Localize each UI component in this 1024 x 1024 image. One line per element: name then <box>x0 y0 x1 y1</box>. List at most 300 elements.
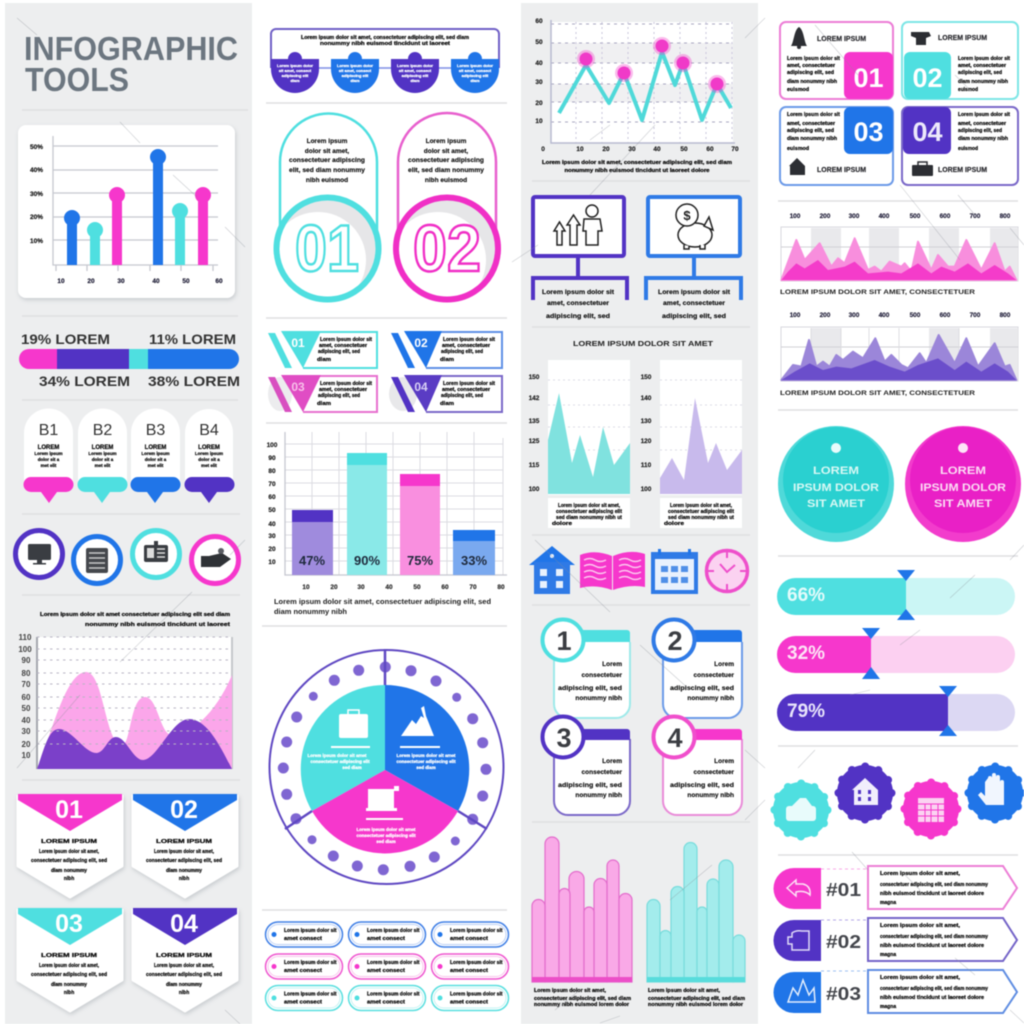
panel: arch 01: 01 <box>295 211 359 285</box>
text block: pink chart caption: LOREM IPSUM DOLOR SIT AMET, CONSECTETUER <box>780 289 975 296</box>
badge: pink circle: SIT AMET <box>934 498 992 510</box>
tab B1: met elit <box>41 463 57 468</box>
x axis labels: 20 <box>330 584 338 591</box>
area chart: cyan: Lorem ipsum dolor sit amet, <box>558 503 621 509</box>
panel: ribbon 04: Lorem ipsum dolor sit <box>443 381 495 387</box>
row: pink pills: Lorem ipsum dolor sit <box>367 960 420 966</box>
tab B2 <box>78 408 128 503</box>
panel: monitor frame with people icon: Lorem ipsum dolor sit <box>542 289 615 296</box>
panel: arrow row #03: nibh euismod tincidunt ut laoreet dolore <box>880 995 984 1001</box>
semicircle 4: sit amet, consect <box>459 68 492 73</box>
panel: arrow row #02: #02 <box>826 932 861 952</box>
y axis labels: 30 <box>268 533 276 540</box>
panel: top header box with four semicircles <box>271 29 499 93</box>
area chart: lavender: 150 <box>641 374 652 381</box>
y axis labels: 40 <box>268 521 276 528</box>
panel: arrow row #02: Lorem ipsum dolor sit amet, <box>880 923 961 929</box>
text block: purple chart caption: LOREM IPSUM DOLOR SIT AMET, CONSECTETUER <box>780 390 975 397</box>
sector: cyan: Lorem ipsum dolor sit amet <box>307 753 367 758</box>
panel: shield card 04: consectetuer adipiscing elit, sed <box>146 972 222 978</box>
panel: card 01 with bell: Lorem ipsum dolor sit <box>787 56 840 62</box>
panel: ribbon 03: amet, consectetuer <box>319 387 367 393</box>
row: blue pills: amet consect <box>284 936 322 942</box>
panel: numbered card 4: Lorem <box>714 758 734 765</box>
area chart: lavender: sed diam nonummy nibh ut <box>668 515 734 521</box>
axis labels: 30 <box>628 146 636 153</box>
area chart: purple mountains <box>781 312 1018 381</box>
y axis labels: 90 <box>22 656 31 665</box>
panel: arrow row #03: magna <box>880 1004 896 1010</box>
panel: numbered card 4 <box>654 716 742 815</box>
tab B2: met elit <box>95 463 111 468</box>
row: cyan pills: Lorem ipsum dolor sit <box>367 992 420 998</box>
row: blue pills: Lorem ipsum dolor sit <box>450 928 503 934</box>
row: pink pills: Lorem ipsum dolor sit <box>284 960 337 966</box>
y axis labels: 70 <box>268 481 276 488</box>
row: pink pills: amet consect <box>284 968 322 974</box>
semicircle 2: sit amet, consect <box>339 68 372 73</box>
panel: card 02 with hat: LOREM IPSUM <box>938 33 987 42</box>
panel: numbered card 2: 2 <box>667 626 683 656</box>
semicircle 3: Lorem ipsum dolor <box>397 63 434 68</box>
panel: numbered card 1: nonummy nibh <box>575 695 622 702</box>
area chart: purple mountains: 100 <box>790 312 801 319</box>
panel: arrow row #03 <box>773 970 1017 1013</box>
panel: numbered card 3: consectetuer <box>582 769 622 776</box>
row: cyan pills: Lorem ipsum dolor sit <box>450 992 503 998</box>
tab B3: LOREM <box>145 445 166 451</box>
icon: hand with coin <box>192 536 238 584</box>
semicircle 4: adipiscing elit <box>462 73 489 78</box>
panel: card 01 with bell: amet, consectetuer <box>787 63 835 69</box>
axis labels: 70 <box>731 146 739 153</box>
panel: ribbon 03: adipiscing elit, sed <box>318 393 360 399</box>
panel: shield card 03: Lorem ipsum dolor sit amet, <box>39 963 100 969</box>
progress bar: 32% <box>777 628 1015 679</box>
text block: area chart caption: nonummy nibh euismod tincidunt ut laoreet <box>85 622 230 628</box>
panel: arch 02: consectetuer adipiscing <box>408 157 484 164</box>
area chart: lavender: Lorem ipsum dolor sit amet, <box>670 503 733 509</box>
line chart with pink markers <box>535 18 739 153</box>
x axis labels <box>302 584 505 591</box>
panel: shield card 04: LOREM IPSUM <box>156 953 212 959</box>
bar chart: cyan rounded bars <box>647 842 745 982</box>
panel: numbered card 3: 3 <box>556 723 572 753</box>
tab B3 <box>131 408 180 503</box>
panel: ribbon 03 <box>268 375 377 412</box>
panel: numbered card 3: nonummy nibh <box>575 792 622 799</box>
panel: card 01 with bell: 01 <box>853 63 884 93</box>
y axis labels: 90 <box>268 455 276 462</box>
semicircle 2: Lorem ipsum dolor <box>337 63 374 68</box>
panel: card 02 with hat: 02 <box>912 63 943 93</box>
area chart: purple mountains: 600 <box>940 312 951 319</box>
row: blue pills: Lorem ipsum dolor sit <box>284 928 337 934</box>
badge: cyan circle: SIT AMET <box>807 498 865 510</box>
panel: shield card 01: 01 <box>55 796 83 824</box>
panel: ribbon 03: Lorem ipsum dolor sit <box>320 381 372 387</box>
y axis labels: 40% <box>30 167 43 174</box>
area chart: pink mountains: 200 <box>820 213 831 220</box>
panel: shield card 01 <box>18 794 122 897</box>
area chart: lavender: dolore <box>664 521 684 527</box>
panel: shield card 04: Lorem ipsum dolor sit amet, <box>154 963 215 969</box>
axis labels: 40 <box>535 60 543 67</box>
axis labels: 60 <box>535 18 543 25</box>
area chart: lavender <box>641 360 742 528</box>
badge: pink circle <box>905 426 1021 542</box>
x axis labels <box>57 278 223 285</box>
tab B2: B2 <box>93 422 112 439</box>
text block: line chart caption: nonummy nibh euismod tincidunt ut laoreet dolore <box>564 168 710 174</box>
tab B3: B3 <box>146 422 165 439</box>
bar value labels: 90% <box>354 553 380 568</box>
panel: card 04 with briefcase: adipiscing elit, sed <box>958 128 1002 134</box>
badge: pink circle: LOREM <box>940 465 986 477</box>
text block: bar chart captions: consectetuer adipiscing elit, sed diam <box>534 996 632 1002</box>
x axis labels: 40 <box>152 278 160 285</box>
area chart: cyan: 142 <box>529 395 540 402</box>
stacked percentage bar: 38% LOREM <box>148 373 240 389</box>
x axis labels: 40 <box>385 584 393 591</box>
text block: bar chart caption <box>274 599 491 616</box>
panel: numbered card 4: adipiscing elit, sed <box>670 782 734 789</box>
icon: clock <box>706 550 748 592</box>
semicircle 4: Lorem ipsum dolor <box>457 63 494 68</box>
panel: arrow row #01 <box>773 866 1017 909</box>
axis labels: 0 <box>541 146 545 153</box>
panel: numbered card 2 <box>654 620 742 718</box>
panel: card 03 with house: LOREM IPSUM <box>817 165 866 174</box>
tab B1: LOREM <box>38 445 59 451</box>
panel: card 04 with briefcase: diam nonummy nibh <box>958 136 1008 142</box>
sector: blue: sed diam <box>416 765 436 770</box>
panel: ribbon 01: adipiscing elit, sed <box>318 349 360 355</box>
panel: shield card 04: 04 <box>170 910 198 938</box>
badge: pink circle: IPSUM DOLOR <box>920 482 1006 494</box>
panel: card 01 with bell: euismod <box>787 87 809 93</box>
panel: arrow row #01: magna <box>880 900 896 906</box>
panel: numbered card 2: adipiscing elit, sed <box>670 685 734 692</box>
panel: shield card 03: LOREM IPSUM <box>41 953 97 959</box>
panel: shield card 04: diam nonummy <box>166 982 202 988</box>
panel: card 02 with hat: amet, consectetuer <box>958 63 1006 69</box>
panel: ribbon 02: Lorem ipsum dolor sit <box>443 337 495 343</box>
panel: monitor frame with piggy bank icon <box>646 197 741 320</box>
panel: shield card 01: nibh <box>64 876 74 882</box>
panel: arch 02: dolor sit amet, <box>424 148 468 155</box>
panel: card 01 with bell <box>780 22 893 99</box>
sector: blue: Lorem ipsum dolor sit amet <box>396 753 456 758</box>
text block: bar chart captions: nonummy nibh euismod lorem dolor <box>534 1002 629 1008</box>
sector: blue <box>385 685 469 811</box>
y axis labels <box>267 442 278 566</box>
icon: growth people <box>554 205 602 245</box>
axis labels: 20 <box>602 146 610 153</box>
y axis labels <box>30 144 43 245</box>
text block: bar chart captions <box>534 988 746 1008</box>
panel: card 04 with briefcase <box>902 107 1018 185</box>
panel: pie chart with dotted ring <box>270 649 504 884</box>
y axis labels: 50% <box>30 144 43 151</box>
tab B4: LOREM <box>198 445 220 451</box>
panel: card 04 with briefcase: Lorem ipsum dolor sit <box>958 112 1010 118</box>
tab B4: met elit <box>201 463 217 468</box>
area chart: cyan <box>529 360 630 528</box>
panel: shield card 03: nibh <box>64 990 74 996</box>
row: cyan pills: Lorem ipsum dolor sit <box>284 992 337 998</box>
area chart: purple mountains: 800 <box>1000 312 1011 319</box>
sector: pink: consectetuer adipiscing elit <box>356 833 416 838</box>
axis labels: 50 <box>680 146 688 153</box>
row: pink pills: amet consect <box>367 968 405 974</box>
tab B1: Lorem ipsum <box>34 451 63 456</box>
semicircle 1: adipiscing elit <box>282 73 309 78</box>
area chart: cyan: sed diam nonummy nibh ut <box>556 515 622 521</box>
sector: cyan <box>301 685 385 811</box>
x axis labels: 10 <box>302 584 310 591</box>
area chart: pink and purple <box>18 633 232 769</box>
panel: arrow row #01: Lorem ipsum dolor sit amet, <box>880 871 961 877</box>
panel: third column background <box>521 3 758 1024</box>
panel: monitor frame with people icon: adipiscing elit, sed <box>546 313 610 320</box>
panel: monitor frame with piggy bank icon: $ <box>683 208 691 223</box>
panel: ribbon 02: diam <box>440 357 455 363</box>
text block: bar chart captions: Lorem ipsum dolor sit amet, <box>648 988 721 994</box>
x axis labels: 60 <box>215 278 223 285</box>
bar chart: pink rounded bars <box>532 837 632 982</box>
icon: cyan scalloped badge with briefcase <box>773 782 829 838</box>
panel: numbered card 3: adipiscing elit, sed <box>558 782 622 789</box>
bars <box>64 149 211 265</box>
panel: shield card 03 <box>18 908 122 1011</box>
panel: numbered card 1: Lorem <box>602 661 622 668</box>
panel: monitor frame with piggy bank icon: Lorem ipsum dolor sit <box>658 289 731 296</box>
semicircle 1: diam <box>290 78 300 83</box>
axis labels: 20 <box>535 100 543 107</box>
panel: card 04 with briefcase: amet, consectetuer <box>958 121 1006 127</box>
progress bar: 79%: 79% <box>787 701 825 722</box>
row: blue pills <box>266 922 508 947</box>
panel: card 03 with house: amet, consectetuer <box>787 121 835 127</box>
panel: ribbon 01: 01 <box>291 336 305 350</box>
row: pink pills <box>266 954 508 979</box>
area chart: purple mountains: 400 <box>879 312 890 319</box>
panel: arch 02 <box>390 113 498 308</box>
title <box>24 30 238 98</box>
text block: bar chart caption: Lorem ipsum dolor sit amet, consectetuer adipiscing elit, sed <box>274 599 491 606</box>
semicircle 3: sit amet, consect <box>399 68 432 73</box>
bar value labels: 33% <box>461 553 487 568</box>
panel: shield card 03: consectetuer adipiscing elit, sed <box>31 972 107 978</box>
panel: numbered card 1: 1 <box>556 626 572 656</box>
panel: ribbon 02: amet, consectetuer <box>442 343 490 349</box>
panel: numbered card 1: adipiscing elit, sed <box>558 685 622 692</box>
y axis labels: 10 <box>268 559 276 566</box>
y axis labels: 100 <box>267 442 278 449</box>
panel: numbered card 3 <box>542 716 630 815</box>
y axis labels: 10% <box>30 238 43 245</box>
icon: id card <box>132 530 180 578</box>
panel: monitor frame with people icon: amet, consectetuer <box>547 300 609 307</box>
tab B4: Lorem ipsum <box>195 451 223 456</box>
axis labels: 60 <box>706 146 714 153</box>
row: blue pills: amet consect <box>367 936 405 942</box>
progress bar: 79% <box>777 686 1015 736</box>
panel: arrow row #02: consectetuer adipiscing elit, sed diam nonummy <box>880 934 988 940</box>
panel: numbered card 1 <box>542 620 630 718</box>
panel: arch 02: 02 <box>413 211 481 285</box>
panel: ribbon 04: 04 <box>414 380 428 394</box>
panel: numbered card 1: consectetuer <box>582 672 622 679</box>
area chart: purple mountains: 300 <box>849 312 860 319</box>
area chart: cyan: 125 <box>529 438 540 445</box>
panel: monitor frame with piggy bank icon: adipiscing elit, sed <box>662 313 726 320</box>
tab B2: dolor sit a <box>92 457 114 462</box>
panel: arrow row #02: magna <box>880 952 896 958</box>
panel: ribbon 04: amet, consectetuer <box>442 387 490 393</box>
text block: line chart caption <box>542 160 733 174</box>
row: blue pills: amet consect <box>450 936 488 942</box>
y axis labels: 70 <box>22 680 31 689</box>
x axis labels: 10 <box>57 278 65 285</box>
panel: monitor frame with people icon <box>533 197 627 320</box>
sector: blue: consectetuer adipiscing elit <box>396 759 456 764</box>
panel: B1 to B4 tabs <box>24 408 235 503</box>
semicircle 1: sit amet, consect <box>279 68 312 73</box>
panel: card 01 with bell: adipiscing elit, sed <box>787 70 834 76</box>
panel: arrow row #01: #01 <box>826 880 861 900</box>
panel: card 02 with hat: adipiscing elit, sed <box>958 70 1002 76</box>
panel: shield card 01: consectetuer adipiscing elit, sed <box>31 858 107 864</box>
panel: card 03 with house: euismod <box>787 146 809 152</box>
area chart: lavender: 140 <box>641 395 652 402</box>
panel: shield card 02 <box>133 794 237 897</box>
panel: ribbon 04: adipiscing elit, sed <box>441 393 483 399</box>
badge: cyan circle: LOREM <box>813 465 859 477</box>
icon: blue scalloped badge with hand <box>967 765 1023 821</box>
panel: arch 01: Lorem ipsum <box>307 138 348 145</box>
tab B3: met elit <box>148 463 164 468</box>
panel: ribbon 01 <box>268 331 377 368</box>
text block: line chart caption: Lorem ipsum dolor sit amet, consectetuer adipiscing elit, sed diam <box>542 160 733 166</box>
panel: ribbon 01: diam <box>317 357 332 363</box>
panel: arch 01: consectetuer adipiscing <box>289 157 365 164</box>
x axis labels: 30 <box>357 584 365 591</box>
area chart: cyan: 115 <box>529 462 540 469</box>
y axis labels: 100 <box>18 645 32 654</box>
bar value labels <box>299 553 487 568</box>
progress bar: 66% <box>777 570 1015 620</box>
axis labels: 50 <box>535 39 543 46</box>
panel: lollipop bar chart <box>18 125 235 298</box>
area chart: pink mountains: 800 <box>1000 213 1011 220</box>
semicircle 3: diam <box>410 78 420 83</box>
semicircle 1 <box>271 52 319 93</box>
panel: card 02 with hat <box>902 22 1018 99</box>
area chart: pink mountains: 400 <box>879 213 890 220</box>
area chart: cyan: 135 <box>529 418 540 425</box>
stacked percentage bar: 11% LOREM <box>149 331 236 347</box>
y axis labels: 80 <box>22 669 31 678</box>
panel: arch 02: Lorem ipsum <box>426 138 467 145</box>
panel: arch 01 <box>270 114 379 308</box>
panel: arch 02: nibh euismod <box>425 177 467 184</box>
panel: top header box with four semicircles: Lorem ipsum dolor sit amet, consectetuer adipiscing elit, sed diam <box>301 35 470 41</box>
tab B4: B4 <box>199 422 219 439</box>
icon: purple scalloped badge with house <box>837 765 893 821</box>
sector: cyan: sed diam <box>342 765 362 770</box>
panel: numbered card 4: 4 <box>667 723 683 753</box>
panel: shield card 03: diam nonummy <box>51 982 87 988</box>
panel: shield card 02: 02 <box>170 796 198 824</box>
area chart: lavender: 110 <box>641 462 652 469</box>
panel: arch 01: dolor sit amet, <box>305 148 349 155</box>
panel: shield card 02: diam nonummy <box>166 868 202 874</box>
area chart: cyan: consectetuer adipiscing elit <box>556 509 622 515</box>
bar value labels: 75% <box>407 553 433 568</box>
panel: left column background <box>5 3 252 1024</box>
area chart: lavender: 120 <box>641 438 652 445</box>
bar value labels: 47% <box>299 553 325 568</box>
panel: card 02 with hat: Lorem ipsum dolor sit <box>958 56 1010 62</box>
text block: bar chart captions: Lorem ipsum dolor sit amet, <box>534 988 607 994</box>
tab B2: Lorem ipsum <box>88 451 117 456</box>
panel: card 01 with bell: diam nonummy nibh <box>787 79 837 85</box>
row: cyan pills: amet consect <box>284 1000 322 1006</box>
tab B2: LOREM <box>92 445 113 451</box>
icon: piggy bank <box>676 204 713 249</box>
area chart: cyan: dolore <box>552 521 572 527</box>
area chart: purple mountains: 500 <box>910 312 921 319</box>
panel: ribbon 01: Lorem ipsum dolor sit <box>320 337 372 343</box>
title: TOOLS <box>25 61 129 98</box>
panel: arrow row #02 <box>773 918 1017 961</box>
y axis labels: 20% <box>30 214 43 221</box>
row: cyan pills <box>266 986 508 1010</box>
panel: shield card 02: Lorem ipsum dolor sit amet, <box>154 849 215 855</box>
area chart: pink mountains <box>781 213 1018 281</box>
area chart: pink mountains: 500 <box>910 213 921 220</box>
panel: arrow row #02: nibh euismod tincidunt ut laoreet dolore <box>880 943 984 949</box>
panel: top header box with four semicircles: nonummy nibh euismod tincidunt ut laoreet <box>320 41 450 47</box>
progress bar: 66%: 66% <box>787 585 825 606</box>
panel: arch 01: nibh euismod <box>306 177 348 184</box>
icon: calendar <box>651 549 698 594</box>
semicircle 4 <box>451 52 499 93</box>
text block: area chart caption <box>40 612 231 628</box>
text block: area chart caption: Lorem ipsum dolor sit amet consectetuer adipiscing elit sed diam <box>40 612 231 618</box>
axis labels: 10 <box>576 146 584 153</box>
panel: card 04 with briefcase: euismod <box>958 146 978 152</box>
dots ring <box>278 662 492 875</box>
text block: bar chart captions: consectetuer adipiscing elit, sed diam <box>648 996 746 1002</box>
panel: card 03 with house: Lorem ipsum dolor sit <box>787 112 840 118</box>
x axis labels: 20 <box>87 278 95 285</box>
row: cyan pills: amet consect <box>450 1000 488 1006</box>
x axis labels: 50 <box>413 584 421 591</box>
tab B4: dolor sit a <box>198 457 220 462</box>
panel: ribbon 04 <box>389 375 502 412</box>
panel: shield card 03: 03 <box>55 910 83 938</box>
area chart: pink mountains: 100 <box>790 213 801 220</box>
y axis labels <box>18 633 32 760</box>
badge: cyan circle <box>778 426 894 542</box>
stacked percentage bar: 19% LOREM <box>21 331 110 347</box>
panel: card 04 with briefcase: 04 <box>912 117 943 147</box>
panel: arrow row #03: consectetuer adipiscing elit, sed diam nonummy <box>880 986 988 992</box>
row: pink pills: amet consect <box>450 968 488 974</box>
